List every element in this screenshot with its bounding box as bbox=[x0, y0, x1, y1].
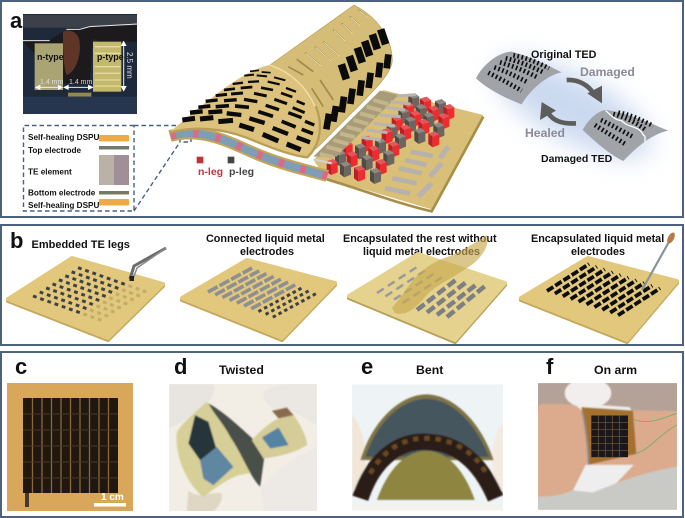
heading: bent: Bent bbox=[416, 363, 443, 377]
sheet front surface with slots bbox=[170, 65, 320, 157]
label: damaged TED: Damaged TED bbox=[541, 153, 613, 165]
base plate bbox=[313, 90, 483, 211]
photo: n-type and p-type legs: 1.4 mm bbox=[69, 79, 93, 86]
label f: f bbox=[546, 354, 554, 379]
layer stack bbox=[99, 135, 129, 206]
heading: encapsulated rest bbox=[343, 233, 497, 258]
top electrode strips beneath fold bbox=[313, 91, 416, 163]
photo c: device top view bbox=[7, 383, 133, 511]
layer stack labels: Top electrode bbox=[28, 146, 82, 155]
curled sheet underside bbox=[270, 5, 392, 157]
plate 2: liquid metal electrodes bbox=[182, 260, 335, 340]
translucent flap bbox=[392, 235, 488, 314]
photo: n-type and p-type legs: 1.4 mm bbox=[40, 79, 64, 86]
sheet edge with TE layers bbox=[170, 133, 327, 176]
label: original TED: Original TED bbox=[531, 49, 597, 61]
label: damaged arrow: Damaged bbox=[580, 65, 635, 79]
layer stack labels: Self-healing DSPU bbox=[28, 201, 100, 210]
photo e: bent device bbox=[352, 384, 503, 510]
sheet: original TED bbox=[476, 52, 562, 104]
layer stack labels: Bottom electrode bbox=[28, 188, 96, 198]
layer stack labels: Self-healing DSPU bbox=[28, 133, 100, 142]
photo: n-type and p-type legs bbox=[23, 14, 137, 114]
photo: n-type and p-type legs: n-type bbox=[37, 52, 64, 62]
panel: c to f bbox=[1, 352, 683, 517]
icon: tweezers bbox=[130, 248, 166, 281]
heading: connected: Connected liquid metal bbox=[206, 233, 325, 245]
heading: encapsulated electrodes bbox=[531, 233, 664, 258]
heading: encapsulated electrodes: Encapsulated liquid metal bbox=[531, 233, 664, 245]
layer stack labels bbox=[28, 133, 100, 210]
plate 1: embedded legs bbox=[8, 248, 166, 340]
heading: twisted: Twisted bbox=[219, 363, 264, 377]
thermoelectric legs bbox=[327, 93, 454, 184]
heading: connected: electrodes bbox=[240, 246, 294, 258]
main illustration: curled device bbox=[170, 5, 483, 211]
heading: encapsulated rest: Encapsulated the rest without bbox=[343, 233, 497, 245]
layer stack labels: TE element bbox=[28, 168, 72, 176]
heading: connected bbox=[206, 233, 325, 258]
icon: pen applicator bbox=[642, 231, 676, 290]
label d: d bbox=[174, 354, 187, 379]
plate 3: encapsulation bbox=[349, 235, 505, 342]
label c: c bbox=[15, 354, 27, 379]
blue glow bbox=[482, 40, 665, 177]
n-leg and p-leg swatches bbox=[197, 157, 234, 163]
label e: e bbox=[361, 354, 373, 379]
scale bar bbox=[94, 503, 126, 506]
photo: n-type and p-type legs: 2.5 mm bbox=[125, 52, 134, 79]
dashed zoom box bbox=[24, 126, 191, 211]
heading: encapsulated electrodes: electrodes bbox=[571, 246, 625, 258]
photo d: twisted device bbox=[169, 384, 317, 511]
plate 4: encapsulated electrodes bbox=[521, 231, 677, 342]
legend: n-leg: n-leg bbox=[198, 166, 223, 178]
label: healed arrow: Healed bbox=[525, 126, 565, 140]
legend: p-leg: p-leg bbox=[229, 166, 254, 178]
label a: a bbox=[10, 8, 23, 33]
label b: b bbox=[10, 228, 23, 253]
photo f: device on arm bbox=[538, 383, 677, 510]
photo c: device top view: 1 cm bbox=[101, 492, 124, 503]
arrow: damaged bbox=[567, 80, 602, 103]
photo: n-type and p-type legs: p-type bbox=[97, 52, 124, 62]
sheet: damaged TED bbox=[583, 110, 668, 161]
heading: on arm: On arm bbox=[594, 363, 637, 377]
arrow: healed bbox=[540, 102, 576, 123]
panel: a bbox=[1, 1, 683, 217]
panel: b bbox=[1, 225, 683, 345]
heading: embedded: Embedded TE legs bbox=[32, 239, 130, 251]
heading: encapsulated rest: liquid metal electrodes bbox=[363, 246, 480, 258]
healing cycle bbox=[476, 40, 668, 177]
